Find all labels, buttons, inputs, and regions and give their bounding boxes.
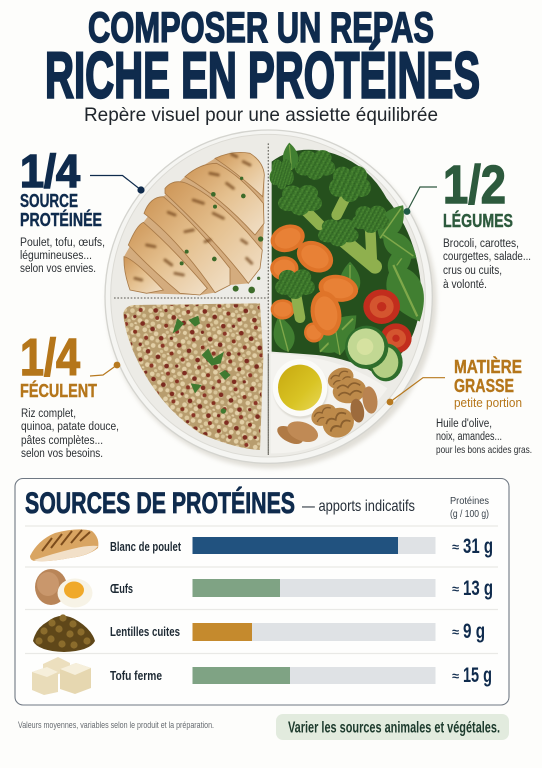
broccoli florets <box>270 150 389 299</box>
quinoa herbs <box>173 316 231 414</box>
bar <box>192 579 436 597</box>
chicken slices <box>124 152 264 295</box>
chicken base <box>124 153 264 295</box>
value: ≈ <box>452 669 459 683</box>
callout pill <box>276 714 509 740</box>
vegetables description <box>443 238 531 291</box>
vegetables description: Brocoli, carottes, <box>443 238 519 250</box>
protein heading: PROTÉINÉE <box>20 209 102 230</box>
starch description: pâtes complètes... <box>21 435 103 447</box>
almonds <box>274 385 379 448</box>
vegetables heading: LÉGUMES <box>443 210 513 231</box>
chicken herbs <box>180 177 263 293</box>
callout: protein quarter <box>20 145 145 275</box>
tomatoes <box>363 289 412 353</box>
protein description <box>20 237 105 275</box>
row: eggs <box>35 569 493 608</box>
title <box>45 4 480 112</box>
starch description: Riz complet, <box>21 408 76 420</box>
fats description: Huile d'olive, <box>436 418 492 430</box>
column heading: (g / 100 g) <box>450 508 489 520</box>
fats heading: MATIÈRE <box>454 356 522 377</box>
carrots <box>267 220 360 342</box>
fats description: noix, amandes... <box>436 431 502 443</box>
section dividers <box>114 143 268 455</box>
fats heading: GRASSE <box>454 376 514 396</box>
chicken grill marks <box>135 154 252 280</box>
value: ≈ <box>452 625 459 639</box>
panel frame <box>15 478 509 705</box>
row: chicken <box>30 529 493 561</box>
bar <box>192 667 436 684</box>
column heading: Protéines <box>450 495 489 507</box>
bar <box>192 623 436 641</box>
value: ≈ <box>452 582 459 596</box>
broccoli stems <box>296 192 375 318</box>
label: Tofu ferme <box>110 669 162 683</box>
starch description <box>21 408 119 460</box>
panel subheading: — apports indicatifs <box>302 498 415 515</box>
protein description: selon vos envies. <box>20 263 96 275</box>
icon: tofu <box>32 657 91 695</box>
plate shadow <box>107 135 437 468</box>
panel heading: SOURCES DE PROTÉINES <box>25 486 295 520</box>
label: Blanc de poulet <box>110 540 182 554</box>
starch heading: FÉCULENT <box>20 380 97 401</box>
panel: protein sources <box>15 478 509 705</box>
value <box>452 664 492 687</box>
starch description: quinoa, patate douce, <box>21 421 119 433</box>
connector: vegetables <box>404 187 437 215</box>
protein heading <box>20 191 102 230</box>
fraction 1/2: 1/2 <box>443 155 506 215</box>
protein description: légumineuses... <box>20 250 92 262</box>
fats portion note: petite portion <box>454 396 522 410</box>
column heading <box>450 495 489 520</box>
icon: chicken breast <box>30 529 98 561</box>
cucumber <box>345 326 403 381</box>
label: Lentilles cuites <box>110 625 180 639</box>
protein description: Poulet, tofu, œufs, <box>20 237 105 249</box>
salad leaves <box>269 142 435 362</box>
callout: vegetables half <box>404 155 531 291</box>
callout: fats portion <box>387 356 532 456</box>
icon: eggs <box>35 569 92 608</box>
healthy fats section <box>271 353 387 453</box>
walnuts <box>307 364 368 443</box>
vegetables description: crus ou cuits, <box>443 265 502 277</box>
fraction 1/4: 1/4 <box>20 145 80 197</box>
connector: starch <box>90 362 120 376</box>
icon: lentils <box>33 614 95 652</box>
plate <box>105 130 432 463</box>
value: 31 g <box>463 535 493 558</box>
callout: starch quarter <box>20 329 120 460</box>
starch description: selon vos besoins. <box>21 448 103 460</box>
vegetable base <box>272 150 422 378</box>
value: 13 g <box>463 577 493 600</box>
fraction 1/4: 1/4 <box>20 329 80 387</box>
bar <box>192 537 436 554</box>
value <box>452 577 493 600</box>
value: 9 g <box>463 620 485 643</box>
quinoa <box>123 303 263 450</box>
connector: fats <box>387 378 445 405</box>
footnote: Valeurs moyennes, variables selon le produit et la préparation. <box>18 720 214 730</box>
section dividers overlay <box>266 355 270 455</box>
row: tofu <box>32 657 492 695</box>
label: Œufs <box>110 582 133 596</box>
value: ≈ <box>452 540 459 554</box>
vegetables description: à volonté. <box>443 279 487 291</box>
connector: protein <box>90 176 145 194</box>
subtitle: Repère visuel pour une assiette équilibrée <box>84 104 438 126</box>
fats description <box>436 418 532 456</box>
plate illustration <box>105 130 437 468</box>
value: 15 g <box>463 664 492 687</box>
row: lentils <box>33 614 485 652</box>
protein heading: SOURCE <box>20 191 78 211</box>
value <box>452 535 493 558</box>
value <box>452 620 485 643</box>
olive oil bowl <box>273 359 328 419</box>
fats heading <box>454 356 522 396</box>
